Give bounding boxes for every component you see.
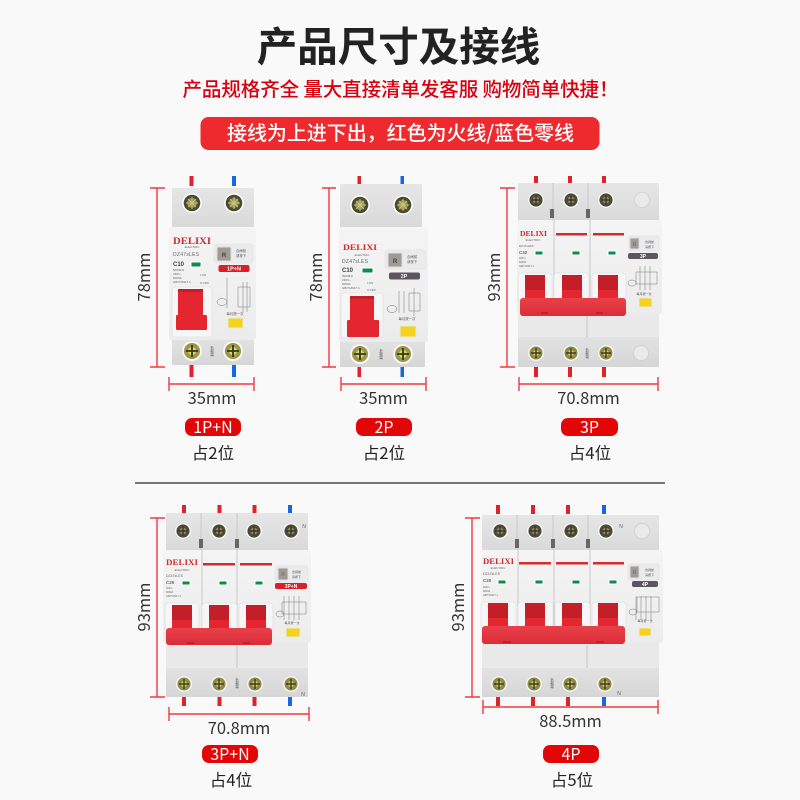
- width dimension 70.8mm: [519, 377, 658, 409]
- product: 3P breaker: [481, 176, 662, 464]
- product: 4P breaker: [445, 505, 663, 791]
- breaker image 2P: 50/60Hz: [342, 274, 354, 278]
- breaker image 4P: 每月按一次: [637, 618, 653, 623]
- pill: 2P: [356, 414, 412, 438]
- breaker image 3P+N: 400V~: [166, 587, 174, 590]
- height dimension 93mm: 93mm: [445, 583, 469, 631]
- module count: 占2位: [363, 440, 405, 464]
- height dimension 93mm: [131, 518, 165, 697]
- breaker image 3P+N: DELIXI: [166, 558, 198, 567]
- breaker image 3P: 请按下: [645, 244, 654, 249]
- breaker image 4P: GB/T16917.1: [483, 594, 498, 597]
- breaker image 2P: ELECTRIC: [355, 253, 370, 257]
- height dimension 78mm: [303, 188, 336, 367]
- breaker image 4P: 请按下: [645, 572, 654, 577]
- breaker image 3P+N: 负载端: [234, 677, 240, 689]
- breaker image 4P: [481, 505, 663, 706]
- breaker image 3P+N: 合闸前: [292, 569, 301, 574]
- breaker image 3P+N: N: [301, 692, 305, 698]
- breaker image 1P+N: DELIXI: [173, 236, 212, 246]
- breaker image 3P: 400V~: [519, 257, 527, 260]
- breaker image 1P+N: R: [222, 253, 227, 259]
- breaker image 3P+N: 每月按一次: [284, 620, 300, 625]
- breaker image 3P+N: R: [281, 572, 285, 578]
- breaker image 3P+N: ELECTRIC: [175, 568, 190, 572]
- breaker image 4P: 400V~: [483, 586, 491, 589]
- breaker image 4P: R: [633, 570, 637, 576]
- breaker image 2P: C10: [342, 268, 354, 274]
- breaker image 2P: 2P: [401, 274, 408, 280]
- breaker image 4P: N: [617, 691, 621, 697]
- height dimension 78mm: 78mm: [131, 253, 155, 301]
- pill: 1P+N: 1P+N: [193, 414, 233, 438]
- breaker image 2P: 每月按一次: [399, 316, 416, 321]
- breaker image 3P: R: [633, 242, 637, 248]
- breaker image 4P: 合闸前: [645, 567, 654, 572]
- width dimension 35mm: 35mm: [188, 385, 236, 409]
- breaker image 4P: 6000A: [483, 590, 491, 593]
- wiring note banner: 接线为上进下出，红色为火线/蓝色零线: [227, 117, 574, 146]
- breaker image 1P+N: O OFF: [200, 281, 209, 285]
- breaker image 4P: 4P: [642, 582, 649, 588]
- breaker image 4P: DELIXI: [483, 557, 514, 566]
- title: 产品尺寸及接线: [257, 14, 540, 73]
- breaker image 2P: [339, 176, 428, 377]
- height dimension 78mm: [131, 188, 165, 367]
- product: 2P breaker: [303, 176, 428, 464]
- breaker image 3P+N: 3P+N: [285, 584, 298, 590]
- section divider: [135, 482, 665, 484]
- breaker image 2P: 合闸前: [407, 254, 418, 259]
- breaker image 4P: N: [619, 524, 623, 530]
- breaker image 1P+N: 230V~: [173, 272, 182, 276]
- height dimension 93mm: 93mm: [131, 583, 155, 631]
- breaker image 3P+N: 请按下: [292, 574, 301, 579]
- width dimension 88.5mm: 88.5mm: [539, 708, 602, 732]
- breaker image 3P: 6000A: [519, 261, 527, 264]
- breaker image 3P+N: GB/T16917.1: [166, 595, 181, 598]
- breaker image 3P+N: DZ47sLES: [166, 574, 184, 578]
- breaker image 3P: 负载端: [584, 347, 590, 359]
- breaker image 2P: GB/T16917.1: [342, 286, 360, 290]
- pill: 4P: [543, 741, 599, 765]
- breaker image 2P: 负载端: [378, 348, 384, 360]
- height dimension 93mm: [445, 518, 480, 697]
- width dimension 35mm: [169, 377, 254, 409]
- breaker image 4P: 负载端: [549, 677, 554, 689]
- module count: 占4位: [210, 767, 252, 791]
- breaker image 3P: 每月按一次: [636, 291, 652, 296]
- breaker image 1P+N: 50/60Hz: [173, 268, 185, 272]
- breaker image 1P+N: 合闸前: [236, 248, 247, 253]
- breaker image 4P: C20: [483, 578, 492, 583]
- breaker image 4P: DZ47sLES: [483, 572, 501, 576]
- pill: 2P: 2P: [374, 414, 394, 438]
- breaker image 2P: R: [393, 259, 398, 265]
- breaker image 1P+N: I ON: [200, 273, 206, 277]
- breaker image 3P+N: [163, 505, 311, 706]
- breaker image 3P: DELIXI: [520, 229, 547, 238]
- breaker image 3P: [517, 176, 662, 377]
- module count: 占4位: [569, 440, 611, 464]
- width dimension 70.8mm: [169, 707, 309, 739]
- breaker image 2P: I ON: [367, 281, 373, 285]
- breaker image 2P: DZ47sLES: [342, 259, 369, 265]
- breaker image 3P+N: 6000A: [166, 591, 174, 594]
- module count: 占2位: [192, 440, 234, 464]
- breaker image 3P+N: C20: [166, 580, 175, 585]
- breaker image 1P+N: 每月按一次: [227, 311, 244, 316]
- breaker image 1P+N: 1P+N: [227, 266, 241, 272]
- breaker image 2P: 6000A: [342, 282, 351, 286]
- breaker image 1P+N: 请按下: [236, 253, 247, 258]
- width dimension 35mm: [341, 377, 426, 409]
- breaker image 3P: DZ47sLES: [519, 244, 534, 248]
- height dimension 93mm: 93mm: [481, 253, 505, 301]
- subtitle: 产品规格齐全 量大直接清单发客服 购物简单快捷！: [182, 73, 618, 102]
- width dimension 70.8mm: 70.8mm: [557, 385, 620, 409]
- breaker image 3P+N: N: [302, 524, 306, 530]
- width dimension 88.5mm: [483, 700, 658, 732]
- pill: 3P+N: 3P+N: [210, 741, 250, 765]
- module count: 占5位: [551, 767, 593, 791]
- breaker image 1P+N: GB/T16917.1: [173, 280, 191, 284]
- breaker image 2P: 请按下: [407, 259, 418, 264]
- height dimension 93mm: [481, 188, 515, 367]
- product: 1P+N breaker: [131, 176, 256, 464]
- breaker image 2P: DELIXI: [343, 242, 378, 252]
- breaker image 4P: ELECTRIC: [491, 566, 506, 570]
- height dimension 78mm: 78mm: [303, 253, 327, 301]
- product: 3P+N breaker: [131, 505, 311, 791]
- pill: 3P: [561, 414, 618, 438]
- breaker image 1P+N: 6000A: [173, 276, 182, 280]
- breaker image 1P+N: 负载端: [209, 345, 214, 357]
- breaker image 1P+N: C10: [173, 262, 185, 268]
- breaker image 3P: 3P: [640, 254, 647, 260]
- pill: 3P: 3P: [580, 414, 599, 438]
- pill: 4P: 4P: [561, 741, 581, 765]
- breaker image 3P: C32: [519, 250, 528, 255]
- breaker image 2P: O OFF: [367, 288, 376, 292]
- width dimension 70.8mm: 70.8mm: [208, 715, 270, 739]
- breaker image 3P: 合闸前: [645, 239, 654, 244]
- width dimension 35mm: 35mm: [359, 385, 408, 409]
- breaker image 3P: ELECTRIC: [526, 238, 541, 242]
- breaker image 3P: GB/T16917.1: [519, 265, 534, 268]
- breaker image 1P+N: ELECTRIC: [185, 245, 200, 249]
- breaker image 1P+N: DZ47sLES: [173, 252, 200, 258]
- breaker image 2P: 230V~: [342, 278, 351, 282]
- breaker image 1P+N: [169, 176, 256, 377]
